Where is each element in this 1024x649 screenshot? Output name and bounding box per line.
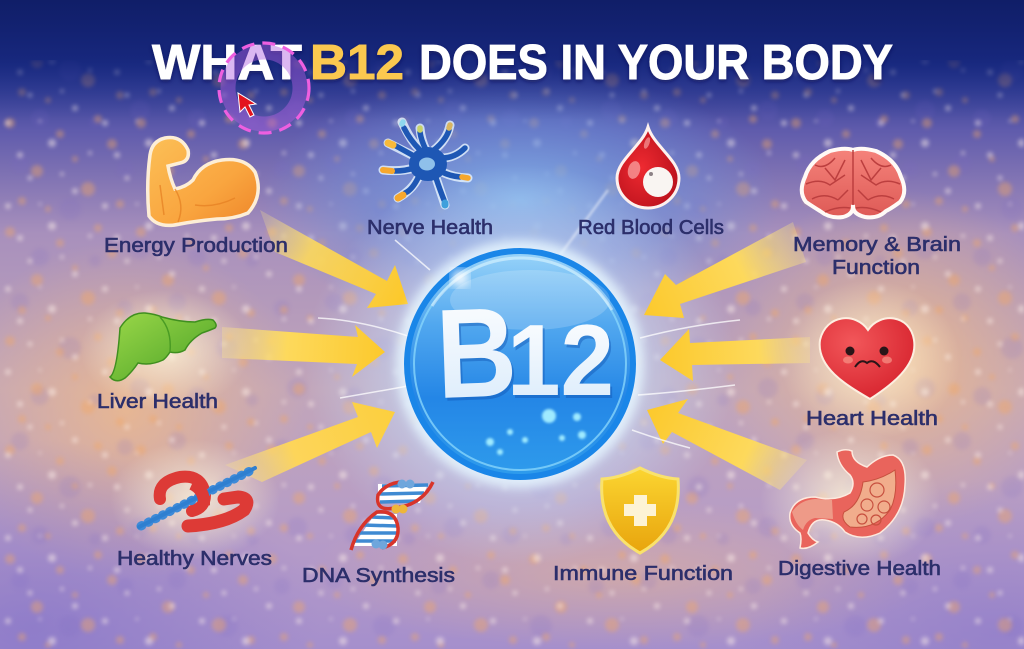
B12 sphere: 12 — [509, 308, 616, 420]
item: energy production — [104, 138, 288, 257]
title: WHAT — [152, 36, 302, 90]
item: healthy nerves — [117, 468, 272, 570]
item: immune function: Immune Function — [553, 563, 733, 585]
arrow: energy — [260, 210, 408, 308]
item: healthy nerves: Healthy Nerves — [117, 548, 272, 570]
B12 sphere: B — [434, 280, 519, 425]
icon: flexed muscle — [148, 138, 258, 225]
icon: nerve with red hooks — [160, 477, 205, 511]
B12 sphere: 12 — [507, 305, 614, 417]
arrow: digestive — [647, 399, 807, 490]
item: red blood cells: Red Blood Cells — [578, 217, 724, 239]
icon: DNA helix — [378, 484, 428, 503]
item: DNA synthesis: DNA Synthesis — [302, 565, 455, 587]
item: DNA synthesis — [302, 480, 455, 587]
item: heart health — [806, 318, 938, 430]
title: DOES IN YOUR BODY — [419, 36, 893, 90]
icon: liver — [110, 313, 216, 381]
icon: stomach — [790, 450, 905, 548]
item: energy production: Energy Production — [104, 235, 288, 257]
cursor highlight ring — [219, 43, 309, 133]
icon: blood drop — [617, 127, 679, 208]
icon: neuron — [383, 122, 468, 205]
arrow: healthy nerves — [225, 402, 395, 482]
icon: shield — [602, 468, 678, 553]
item: digestive health — [778, 450, 941, 580]
arrow: memory — [644, 222, 806, 318]
item: liver health — [97, 313, 218, 413]
warm halos behind icons — [80, 280, 960, 570]
B12 sphere — [318, 240, 740, 488]
item: nerve health — [367, 122, 493, 239]
icon: brain — [802, 149, 904, 217]
item: heart health: Heart Health — [806, 408, 938, 430]
item: immune function — [553, 468, 733, 585]
item: memory and brain: Memory & Brain — [793, 234, 961, 256]
red blood cells ray — [560, 190, 608, 255]
B12 sphere: B — [436, 283, 521, 428]
item: red blood cells — [578, 127, 724, 239]
item: nerve health: Nerve Health — [367, 217, 493, 239]
icon: sad heart — [820, 318, 914, 399]
item: digestive health: Digestive Health — [778, 558, 941, 580]
item: liver health: Liver Health — [97, 391, 218, 413]
title — [152, 36, 893, 90]
arrow: liver — [222, 325, 385, 377]
arrow: heart — [660, 329, 810, 381]
item: memory and brain: Function — [832, 257, 920, 279]
title: B12 — [310, 36, 404, 90]
arrows pointing to B12 — [222, 210, 810, 490]
item: memory and brain — [793, 149, 961, 279]
